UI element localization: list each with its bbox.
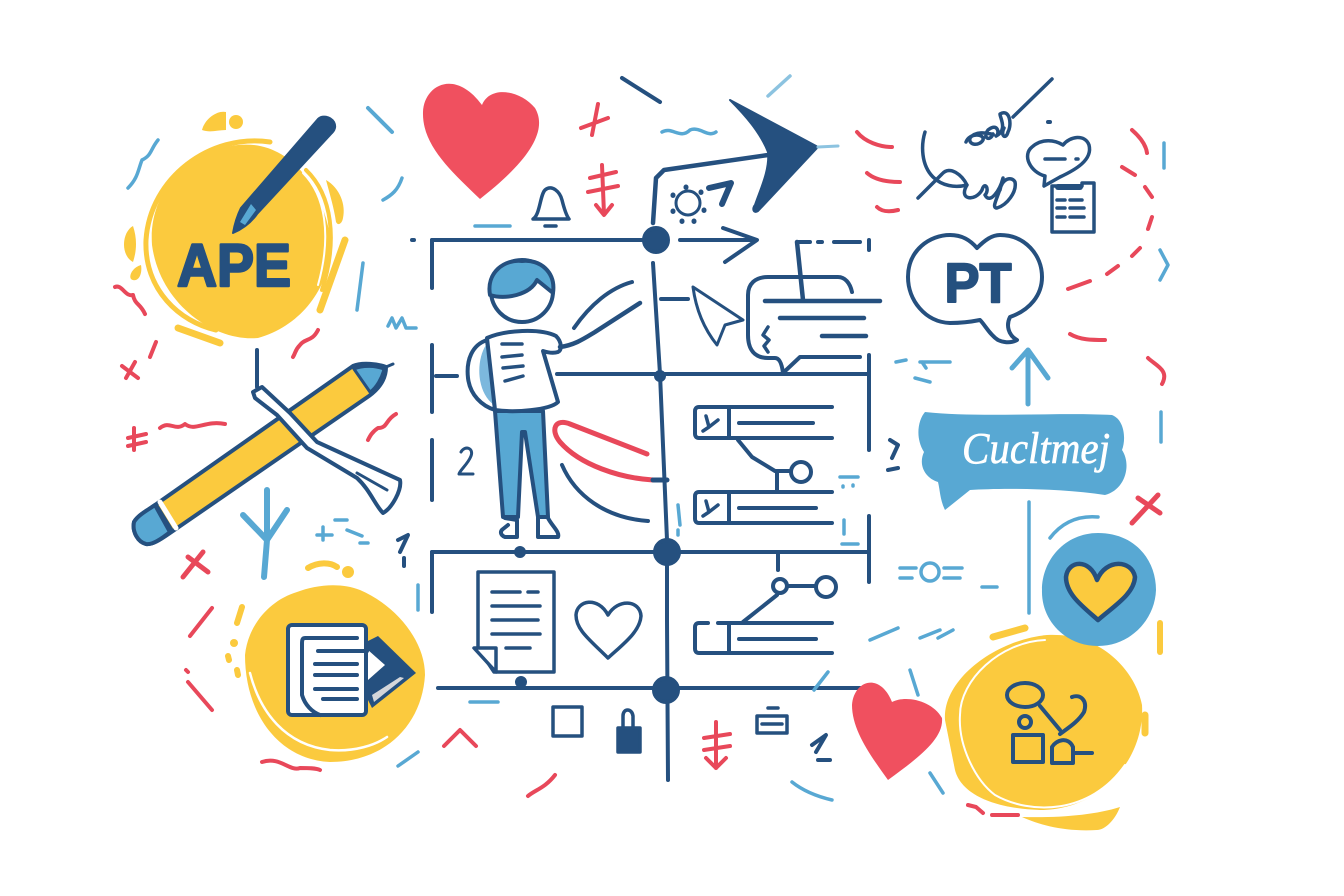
torso	[487, 331, 561, 411]
list row 1	[695, 407, 832, 438]
icon: big arrow with sun	[653, 100, 838, 223]
curved strokes near person	[574, 282, 632, 328]
doodle accents: red	[115, 104, 1164, 815]
arm	[560, 303, 640, 347]
icon: chevron	[367, 636, 416, 708]
badge: heart	[1042, 533, 1156, 646]
arrow: blue down	[243, 490, 287, 577]
icon: pen	[233, 117, 335, 233]
head	[491, 260, 553, 322]
bottom small icons	[553, 707, 787, 752]
badge: documents	[228, 563, 425, 762]
speech bubble: PT: PT	[944, 251, 1012, 314]
banner: Cucltmej: Cucltmej	[962, 424, 1110, 473]
cursor arrow	[693, 287, 743, 345]
icon: square	[553, 707, 582, 736]
icon: lock	[618, 710, 640, 752]
icon: large red heart	[423, 84, 539, 199]
number 2	[459, 448, 473, 474]
icon: bell	[533, 188, 569, 226]
doodle accents: navy	[398, 78, 1050, 760]
shirt lines	[502, 344, 523, 381]
legs	[495, 411, 548, 517]
banner: Cucltmej	[918, 412, 1127, 510]
speech bubble: chat	[748, 242, 880, 373]
connector vertical	[1027, 502, 1031, 613]
person	[468, 260, 640, 537]
badge: APE with pen	[124, 112, 345, 343]
icon: document stack	[288, 625, 367, 715]
connector 1	[738, 440, 811, 492]
red loop	[555, 422, 667, 521]
pencil with ribbon	[134, 350, 400, 544]
label: APE: APE	[177, 232, 291, 299]
document	[474, 572, 554, 672]
timeline grid	[432, 228, 869, 780]
doodle accents: yellow	[1157, 623, 1163, 652]
arrow: up blue	[1012, 350, 1048, 404]
icon: gadget	[757, 708, 787, 733]
badge: shapes	[945, 628, 1145, 830]
list row 3	[695, 623, 832, 653]
hair	[489, 261, 553, 297]
feet	[501, 518, 558, 537]
connector 2	[743, 553, 836, 622]
satchel	[468, 340, 495, 410]
script scribble	[918, 79, 1052, 208]
icon: chat and note	[1028, 137, 1094, 232]
icon: red heart lower	[852, 683, 942, 780]
list row 2	[695, 492, 832, 523]
speech bubble: PT	[908, 235, 1042, 342]
ribbon	[253, 350, 400, 513]
icon: outline heart	[576, 602, 641, 658]
doodle accents: blue	[128, 76, 1168, 800]
arrow: timeline top	[680, 228, 757, 262]
